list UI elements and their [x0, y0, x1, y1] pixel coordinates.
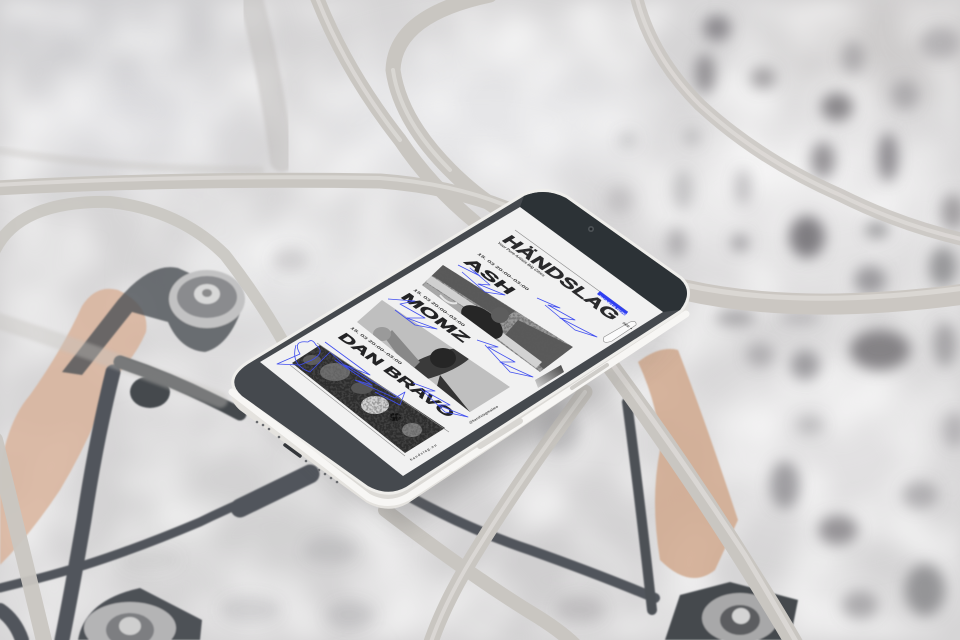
side buttons: [480, 365, 607, 446]
phone body: [232, 192, 687, 506]
event: Ash: ASH: [460, 256, 518, 297]
event: Ash: 15. 03 20:00–03:00: [476, 252, 531, 291]
photo: Dan Bravo: [292, 345, 445, 453]
button: see more: [603, 321, 636, 342]
event: Dan Bravo: [292, 327, 454, 453]
screen: [260, 207, 663, 476]
event: Dan Bravo: DAN BRAVO: [334, 331, 458, 420]
tag: blue label: [597, 291, 628, 317]
photo: Ash: [422, 265, 573, 372]
event: Momz: 15. 03 20:00–03:00: [412, 288, 467, 327]
gradient swatch: [535, 365, 564, 388]
title: Händslag: Your Pure Artists Big Cities: [496, 241, 547, 277]
footer link text: [409, 405, 499, 462]
event: Momz: [357, 289, 510, 412]
speaker holes: [256, 421, 338, 483]
phone front glass: [234, 192, 687, 492]
tag: blue label: TICKETS NOW: [597, 295, 628, 317]
connector: bottom right valve: [665, 582, 798, 640]
event: Momz: MOMZ: [397, 291, 474, 345]
upper bezel with camera: [520, 192, 687, 312]
orange arms seen through the surface: [0, 289, 738, 578]
photo: Momz: [357, 300, 510, 412]
event: Ash: [422, 253, 573, 372]
footer link text: handslag.nu: [409, 443, 437, 462]
charging port: [285, 445, 300, 456]
dark cables under the surface: [0, 362, 655, 640]
phone shadow: [250, 330, 690, 530]
footer link text: @handslagmalmo: [468, 405, 499, 425]
connector: bottom left valve: [78, 588, 202, 640]
button: see more: SEE +: [621, 322, 634, 330]
connector: upper left valve: [62, 267, 245, 408]
blue handwritten signatures: [277, 265, 597, 417]
title: Händslag: HÄNDSLAG: [498, 232, 625, 323]
phone: [232, 192, 687, 506]
event: Dan Bravo: 15. 03 20:00–03:00: [349, 326, 404, 365]
